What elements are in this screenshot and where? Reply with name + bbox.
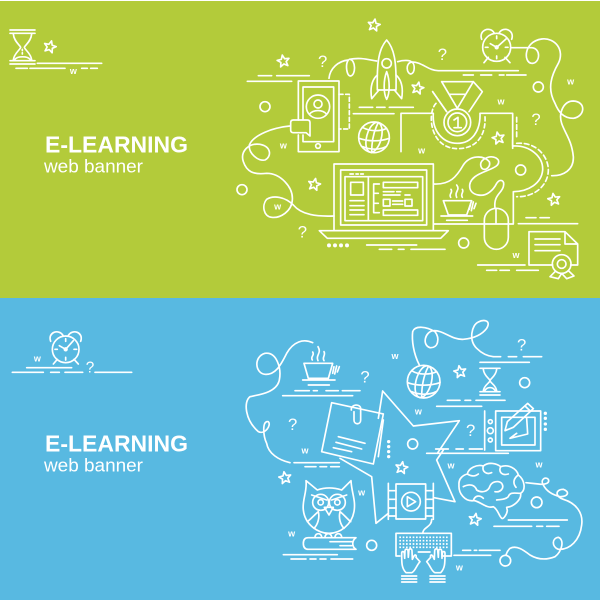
- star: [453, 365, 467, 378]
- labels w, upper scene: w: [279, 141, 287, 151]
- dots beside note: [387, 440, 390, 458]
- labels w: w: [414, 407, 422, 417]
- star speech outline lower: [340, 450, 455, 523]
- icon: alarm clock: [481, 29, 512, 63]
- curve from brain: [506, 478, 582, 559]
- labels w: [273, 146, 519, 260]
- circle: [520, 378, 530, 388]
- tablet dots: [544, 412, 547, 431]
- subheading: web banner (blue): web banner: [43, 456, 143, 476]
- curve left of laptop: [243, 126, 334, 217]
- icon: owl on book: [303, 481, 356, 549]
- icon: hourglass small: [10, 30, 35, 64]
- curve to globe: [412, 321, 493, 365]
- labels w: w: [273, 202, 281, 212]
- lines right of keyboard: [454, 550, 500, 555]
- icon: hourglass: [480, 368, 500, 395]
- lines under laptop: [367, 245, 445, 249]
- ground lines: [12, 368, 132, 372]
- curve from clock: [512, 39, 583, 176]
- frame around medal: [401, 113, 513, 152]
- dashes right of curve: [480, 357, 542, 362]
- question marks, upper scene: ?: [531, 110, 541, 129]
- dashed arc around medal: [431, 103, 485, 149]
- lines under book: [283, 555, 353, 559]
- labels w: w: [287, 528, 295, 538]
- icon: video player film: [388, 483, 433, 519]
- icon: globe: [407, 364, 440, 399]
- labels w, upper scene: w: [496, 97, 504, 107]
- laptop connector and puzzle outline: [434, 140, 543, 224]
- question marks, upper scene: ?: [318, 52, 327, 71]
- circle: [408, 439, 418, 449]
- labels w, upper scene: w: [566, 77, 574, 87]
- question marks: ?: [360, 368, 370, 387]
- question mark: ?: [298, 223, 307, 242]
- question marks: [288, 335, 526, 440]
- labels w: w: [300, 446, 308, 456]
- blue background: [0, 298, 600, 600]
- dashes right of rocket: [463, 72, 526, 77]
- lines above certificate: [518, 218, 578, 224]
- labels w: w: [390, 351, 398, 361]
- stars, lower part of upper scene: [307, 177, 561, 206]
- ground lines: [16, 63, 102, 68]
- icon: coffee cup: [441, 185, 476, 220]
- stars: [278, 461, 482, 526]
- icon: drawing tablet: [485, 403, 541, 451]
- labels w: [287, 459, 542, 573]
- labels w: w: [417, 146, 425, 156]
- lines under coffee: [283, 391, 360, 396]
- question marks, upper scene: ?: [438, 45, 447, 64]
- labels w: w: [511, 250, 519, 260]
- dashes under tablet: [427, 449, 508, 453]
- icon: keyboard with hands: [396, 533, 451, 582]
- heading: E-LEARNING (green): E-LEARNING: [45, 132, 188, 158]
- icon: mouse: [484, 208, 508, 249]
- labels w, upper scene: [279, 77, 574, 151]
- labels w: w: [357, 487, 365, 497]
- lines under hourglass: [437, 400, 505, 406]
- icon: globe: [359, 121, 389, 154]
- icon: star: [43, 39, 57, 53]
- laptop dots: [327, 243, 349, 247]
- question mark: ?: [86, 360, 94, 377]
- label w: w: [33, 353, 41, 363]
- curve to mouse: [433, 157, 504, 208]
- dashes left of phone: [247, 76, 309, 81]
- icon: certificate: [529, 232, 578, 279]
- labels w: w: [446, 461, 454, 471]
- lines under brain: [494, 520, 567, 526]
- icon: medal: [433, 82, 482, 136]
- question marks: ?: [517, 335, 526, 354]
- star speech outline upper: [378, 391, 459, 453]
- icon: phone with profile: [291, 81, 349, 152]
- lines under note: [294, 463, 339, 467]
- heading: E-LEARNING (blue): E-LEARNING: [45, 430, 188, 456]
- question marks: ?: [466, 421, 475, 440]
- labels w: w: [534, 459, 542, 469]
- subheading: web banner (green): web banner: [43, 156, 143, 176]
- icon: laptop: [319, 164, 448, 238]
- dashes under rocket: [353, 107, 413, 114]
- panel: blue banner: [0, 298, 600, 600]
- dashed puzzle arc: [517, 143, 548, 197]
- circles, lower part of upper scene: [237, 165, 526, 248]
- curve left of coffee: [246, 341, 313, 463]
- icon: brain: [459, 463, 524, 518]
- labels w: [300, 351, 422, 456]
- stars, upper scene: [276, 18, 505, 144]
- labels w: w: [455, 563, 463, 573]
- label w: w: [69, 66, 77, 76]
- curve through rocket: [329, 58, 518, 78]
- dashed vertical: [514, 117, 519, 138]
- lines under certificate: [478, 265, 538, 270]
- icon: rocket: [371, 40, 402, 99]
- wire to keyboard: [423, 519, 432, 533]
- question marks: ?: [288, 415, 297, 434]
- decorative circles, upper scene: [260, 82, 543, 112]
- icon: alarm clock small: [50, 332, 81, 364]
- icon: note with paperclip: [322, 403, 383, 464]
- icon: coffee cup: [303, 347, 339, 385]
- panel: green banner: [0, 1, 600, 298]
- circles: [367, 497, 542, 566]
- green background: [0, 1, 600, 298]
- question marks, upper scene: [318, 45, 541, 129]
